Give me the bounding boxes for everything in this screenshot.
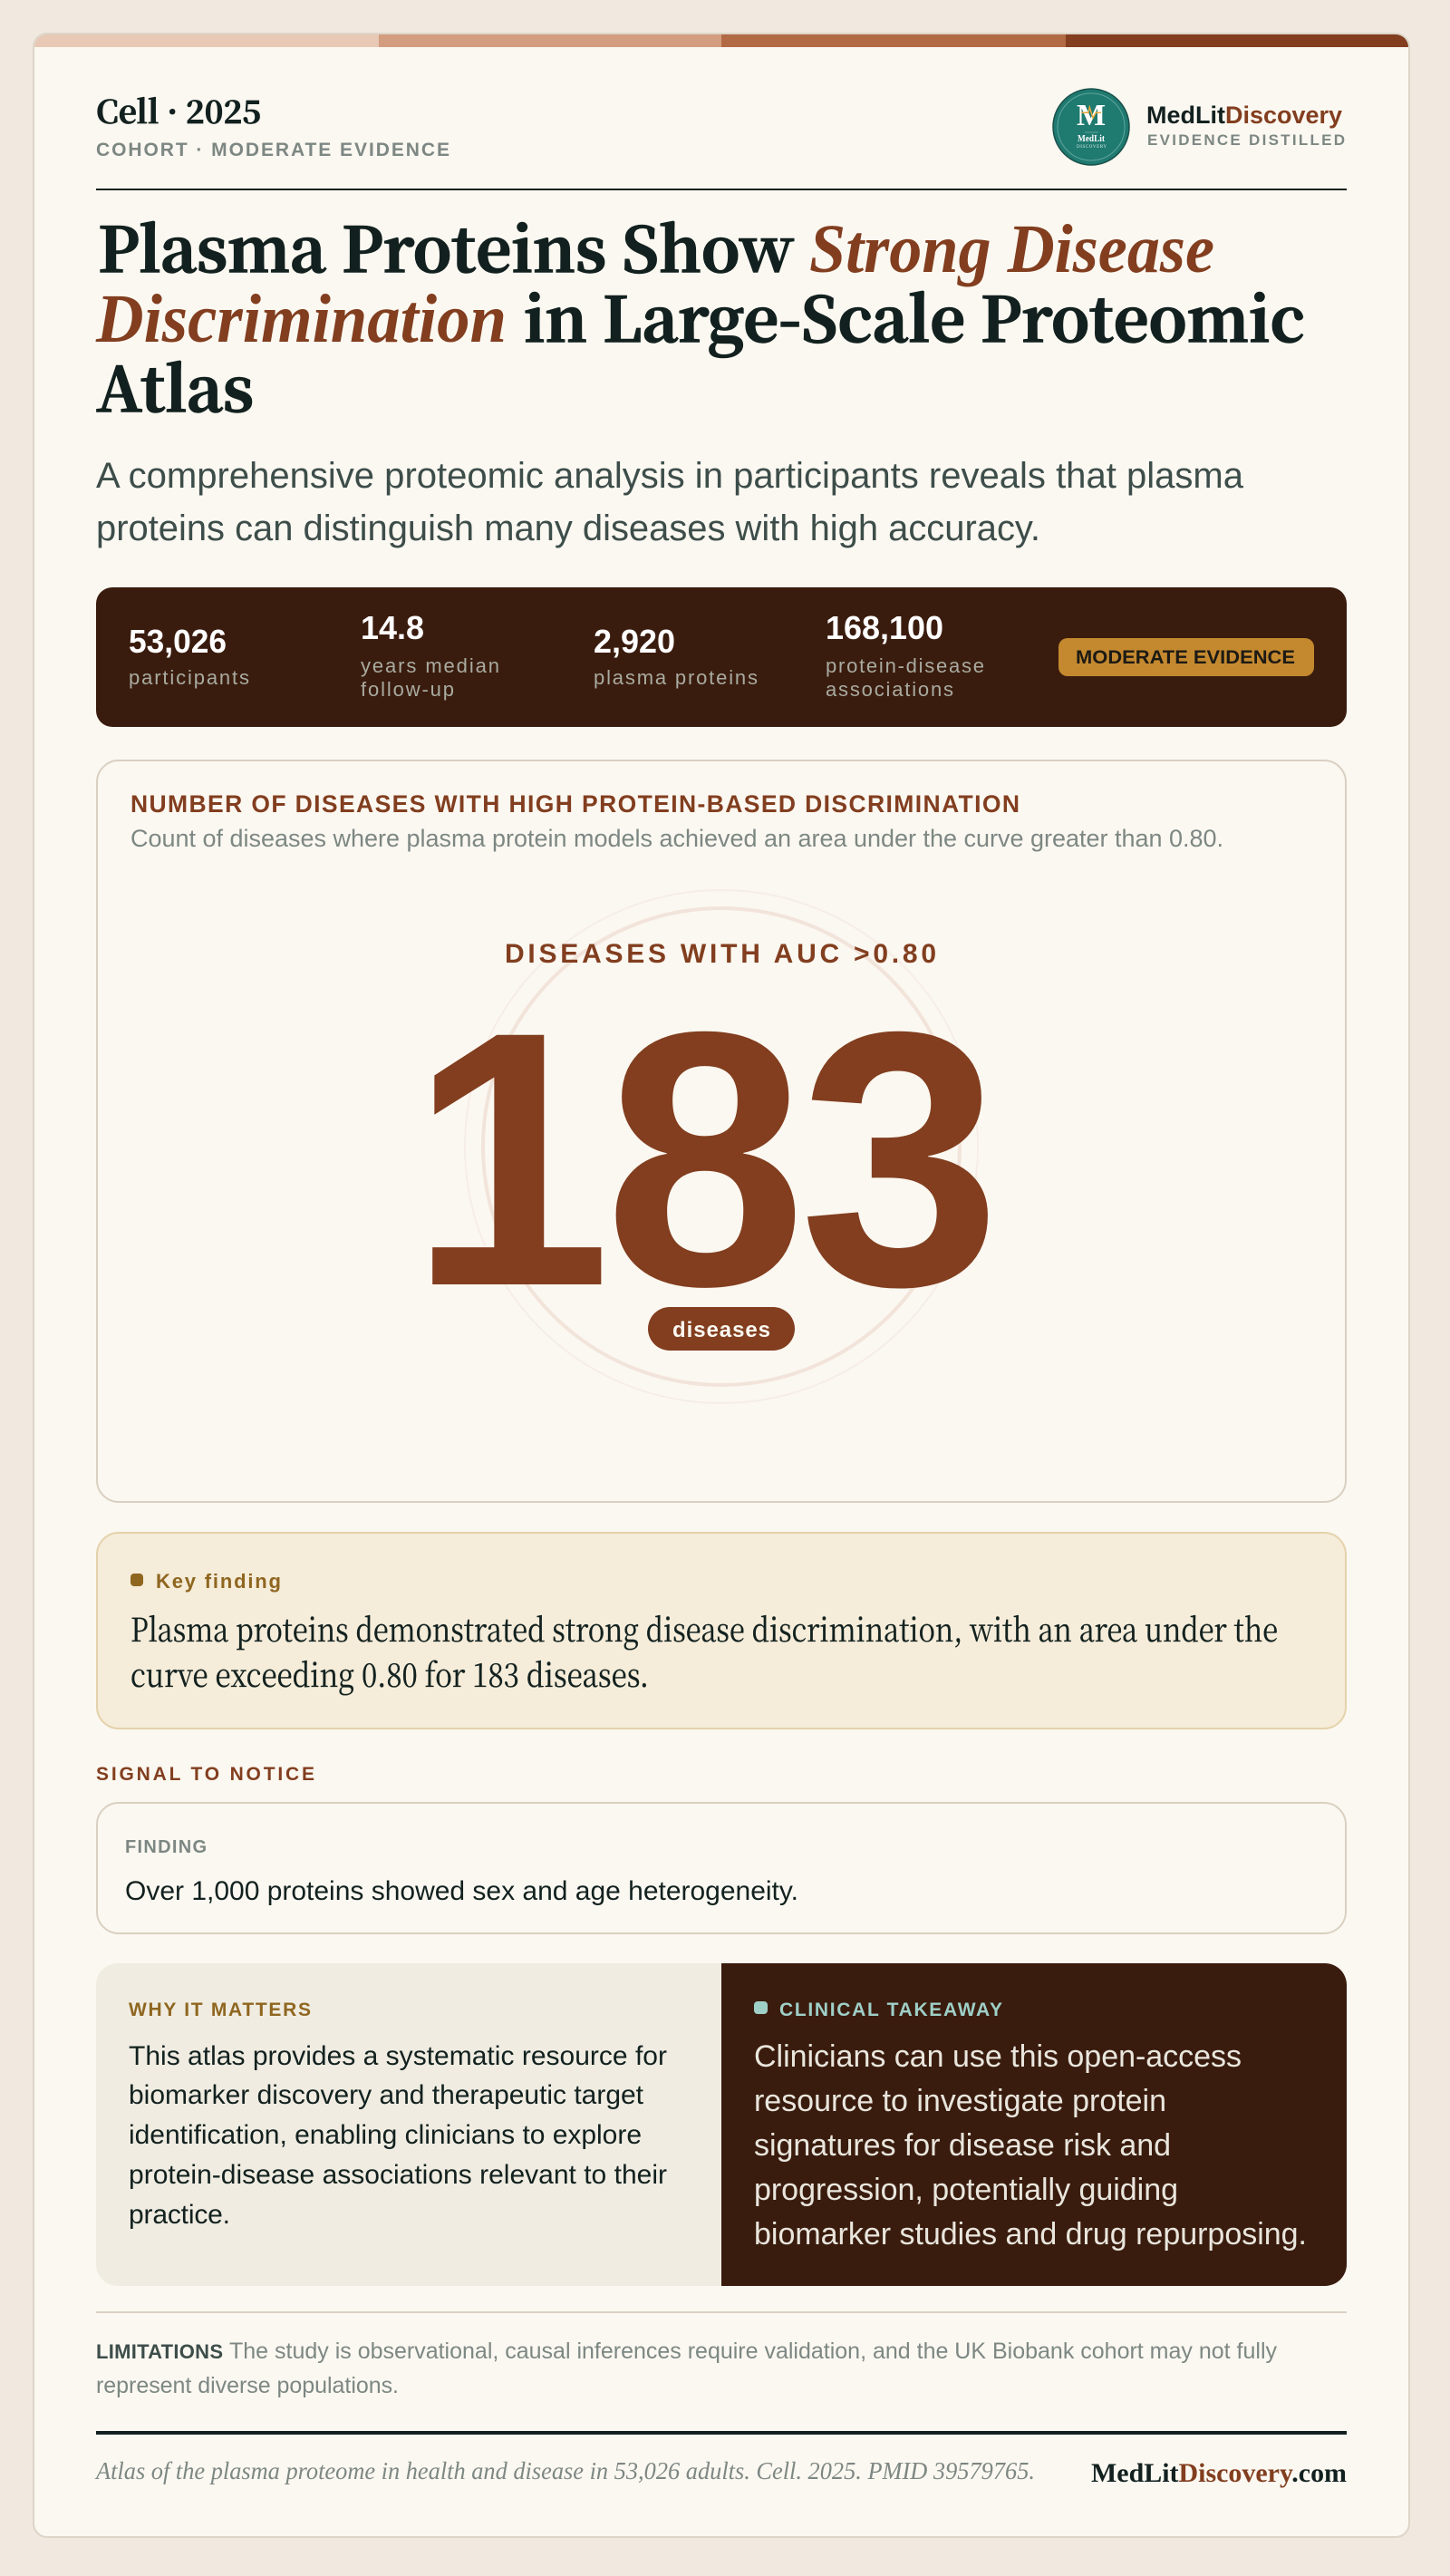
evidence badge — [1058, 638, 1314, 676]
panel: finding: Over 1,000 proteins showed sex and age heterogeneity. — [125, 1876, 798, 1906]
limitations note — [96, 2339, 1278, 2398]
panel: clinical takeaway: Clinicians can use this open-access — [754, 2039, 1242, 2074]
panel: key finding — [97, 1533, 1346, 1729]
evidence badge: MODERATE EVIDENCE — [1076, 646, 1295, 668]
logo badge: MedLit Discovery — [1053, 89, 1129, 165]
header: journal and study type: Cell · 2025 — [96, 88, 261, 133]
panel: clinical takeaway: CLINICAL TAKEAWAY — [779, 2000, 1002, 2020]
stat: participants: 53,026 — [129, 623, 227, 660]
brand wordmark: EVIDENCE DISTILLED — [1147, 131, 1345, 149]
panel: clinical takeaway — [721, 1963, 1347, 2286]
brand wordmark: MedLitDiscovery — [1146, 102, 1342, 129]
stat: associations: protein-disease — [826, 654, 984, 677]
subtitle — [96, 456, 1244, 548]
stat: plasma proteins: 2,920 — [594, 623, 675, 660]
logo badge: MedLit Discovery: MedLit — [1078, 134, 1106, 144]
panel: finding: FINDING — [125, 1837, 207, 1857]
header: journal and study type — [96, 88, 450, 160]
citation: Atlas of the plasma proteome in health and disease in 53,026 adults. Cell. 2025. PMID 39579765. — [94, 2457, 1035, 2484]
stat: participants — [129, 623, 249, 689]
title: Plasma Proteins Show — [98, 202, 795, 290]
icon: key finding dot — [130, 1574, 143, 1586]
stat: associations: 168,100 — [826, 609, 943, 646]
header: journal and study type: COHORT · MODERATE EVIDENCE — [96, 140, 450, 160]
subtitle: proteins can distinguish many diseases with high accuracy. — [96, 508, 1040, 548]
panel: clinical takeaway: biomarker studies and drug repurposing. — [754, 2217, 1307, 2252]
panel: number of diseases — [97, 760, 1346, 1502]
panel: why it matters: practice. — [129, 2200, 230, 2230]
key finding text: Plasma proteins demonstrated strong disease discrimination, with an area under the — [130, 1605, 1278, 1651]
key finding text — [130, 1605, 1278, 1697]
stat: associations: associations — [826, 678, 953, 701]
chart subheading: Count of diseases where plasma protein models achieved an area under the curve greater than 0.80. — [130, 825, 1223, 852]
stat: follow-up: follow-up — [361, 678, 454, 701]
title: Strong Disease — [809, 211, 1214, 287]
panel: clinical takeaway: resource to investigate protein — [754, 2084, 1166, 2118]
stat: follow-up: 14.8 — [361, 609, 424, 646]
panel: why it matters: protein-disease associations relevant to their — [129, 2160, 667, 2190]
title: Discrimination — [95, 281, 507, 357]
big number graphic: diseases — [672, 1318, 770, 1342]
brand wordmark — [1146, 102, 1345, 149]
panel: why it matters — [96, 1963, 721, 2286]
panel: why it matters: This atlas provides a systematic resource for — [129, 2041, 667, 2071]
title — [95, 202, 1305, 430]
footer brand: MedLitDiscovery.com — [1091, 2458, 1347, 2488]
top colour band — [33, 34, 1410, 47]
limitations note: The study is observational, causal inferences require validation, and the UK Biobank cohort may not fully — [229, 2339, 1278, 2364]
logo badge: MedLit Discovery: M — [1077, 99, 1106, 132]
stat: plasma proteins — [594, 623, 758, 689]
limitations note: represent diverse populations. — [96, 2373, 399, 2398]
logo badge: MedLit Discovery: DISCOVERY — [1077, 145, 1107, 150]
key finding text: curve exceeding 0.80 for 183 diseases. — [130, 1651, 649, 1697]
chart heading: NUMBER OF DISEASES WITH HIGH PROTEIN-BASED DISCRIMINATION — [130, 790, 1020, 818]
panel: why it matters: biomarker discovery and therapeutic target — [129, 2080, 644, 2110]
stat: follow-up: years median — [361, 654, 499, 677]
stat: participants: participants — [129, 666, 249, 689]
title: Atlas — [96, 342, 254, 430]
key finding label: Key finding — [156, 1570, 281, 1593]
limitations note: LIMITATIONS — [96, 2340, 223, 2363]
heading: signal to notice: SIGNAL TO NOTICE — [96, 1764, 314, 1785]
big number graphic: DISEASES WITH AUC >0.80 — [505, 939, 936, 969]
stat: associations — [826, 609, 984, 701]
stat: follow-up — [361, 609, 499, 701]
big number graphic: 183 — [410, 956, 994, 1361]
title: in Large-Scale Proteomic — [524, 272, 1305, 360]
panel: why it matters: identification, enabling clinicians to explore — [129, 2120, 642, 2150]
panel: clinical takeaway: signatures for disease risk and — [754, 2128, 1171, 2163]
stats bar — [96, 587, 1347, 727]
stat: plasma proteins: plasma proteins — [594, 666, 758, 689]
panel: clinical takeaway: progression, potentially guiding — [754, 2173, 1178, 2207]
panel: finding — [97, 1803, 1346, 1933]
icon: takeaway dot — [754, 2001, 768, 2014]
panel: why it matters: WHY IT MATTERS — [129, 2000, 311, 2020]
subtitle: A comprehensive proteomic analysis in participants reveals that plasma — [96, 456, 1244, 496]
